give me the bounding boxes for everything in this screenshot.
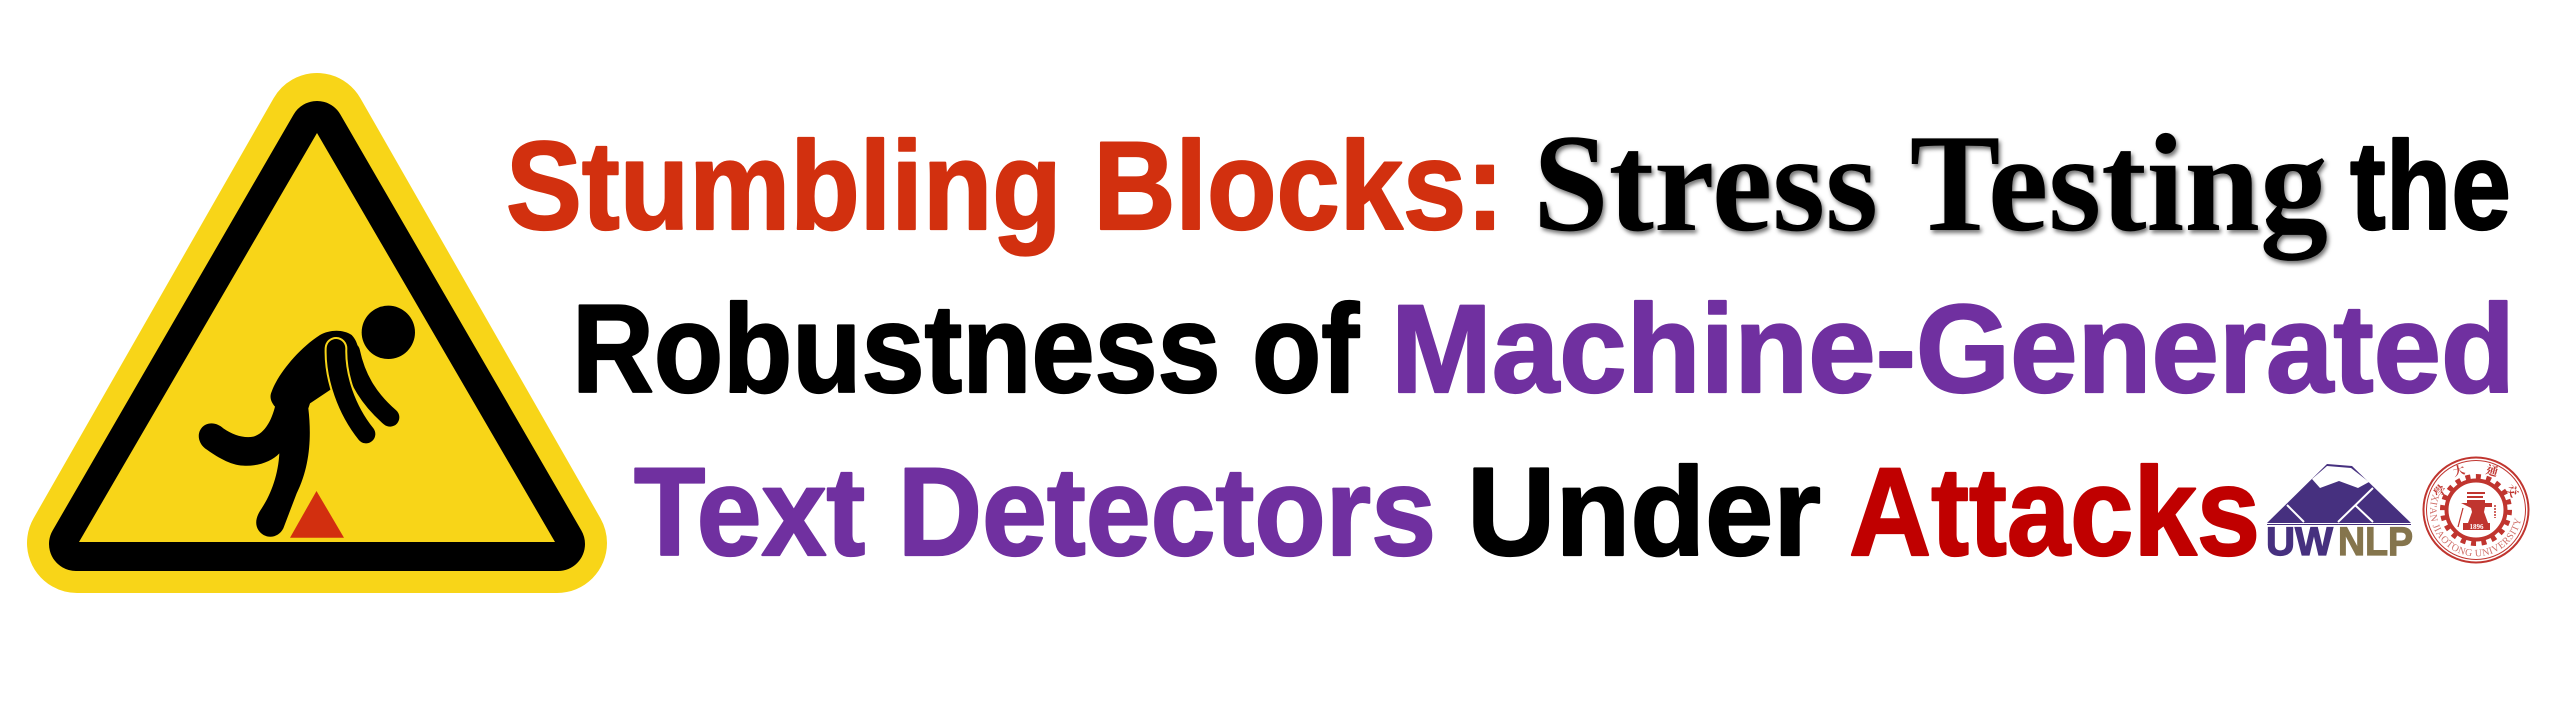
icon: warning triangle with stumbling person	[76, 123, 558, 544]
seal rings	[2424, 458, 2528, 562]
seal Chinese name: 通	[2484, 462, 2500, 479]
title: the: the	[2350, 117, 2511, 256]
icon: stumbling person	[199, 306, 415, 537]
title: Stumbling Blocks: Stumbling Blocks:	[506, 117, 1504, 256]
triangle: yellow outer border	[77, 123, 557, 543]
title: Stress Testing: Stress Testing	[1533, 106, 2328, 261]
seal anvil	[2458, 492, 2495, 527]
logo: UW NLP	[2266, 464, 2413, 564]
title: Under: Under	[1467, 443, 1821, 582]
seal English name: XI'AN JIAOTONG UNIVERSITY	[2430, 494, 2521, 556]
title: Text Detectors: Text Detectors	[634, 443, 1436, 582]
logo text: UW: UW	[2266, 520, 2333, 564]
title: Robustness of: Robustness of	[572, 280, 1359, 419]
logo mountain	[2267, 464, 2411, 524]
title line 1	[506, 106, 2511, 261]
seal year: 1896	[2470, 523, 2484, 531]
seal Chinese name	[2429, 462, 2523, 501]
title line 2	[572, 280, 2515, 419]
triangle: yellow inner field	[79, 133, 555, 542]
seal gear	[2442, 476, 2510, 544]
title: Machine-Generated: Machine-Generated	[1391, 280, 2515, 419]
title line 3	[634, 443, 2260, 582]
seal Chinese name: 學	[2429, 481, 2449, 501]
triangle: black band	[76, 128, 558, 544]
title: Attacks: Attacks	[1849, 443, 2260, 582]
logo text: NLP: NLP	[2338, 520, 2413, 564]
icon: red stumbling block	[290, 491, 344, 538]
seal Chinese name: 交	[2503, 481, 2523, 501]
title	[506, 106, 2515, 582]
logo: Xi'an Jiaotong University seal	[2422, 456, 2530, 564]
seal Chinese name: 大	[2451, 462, 2467, 479]
